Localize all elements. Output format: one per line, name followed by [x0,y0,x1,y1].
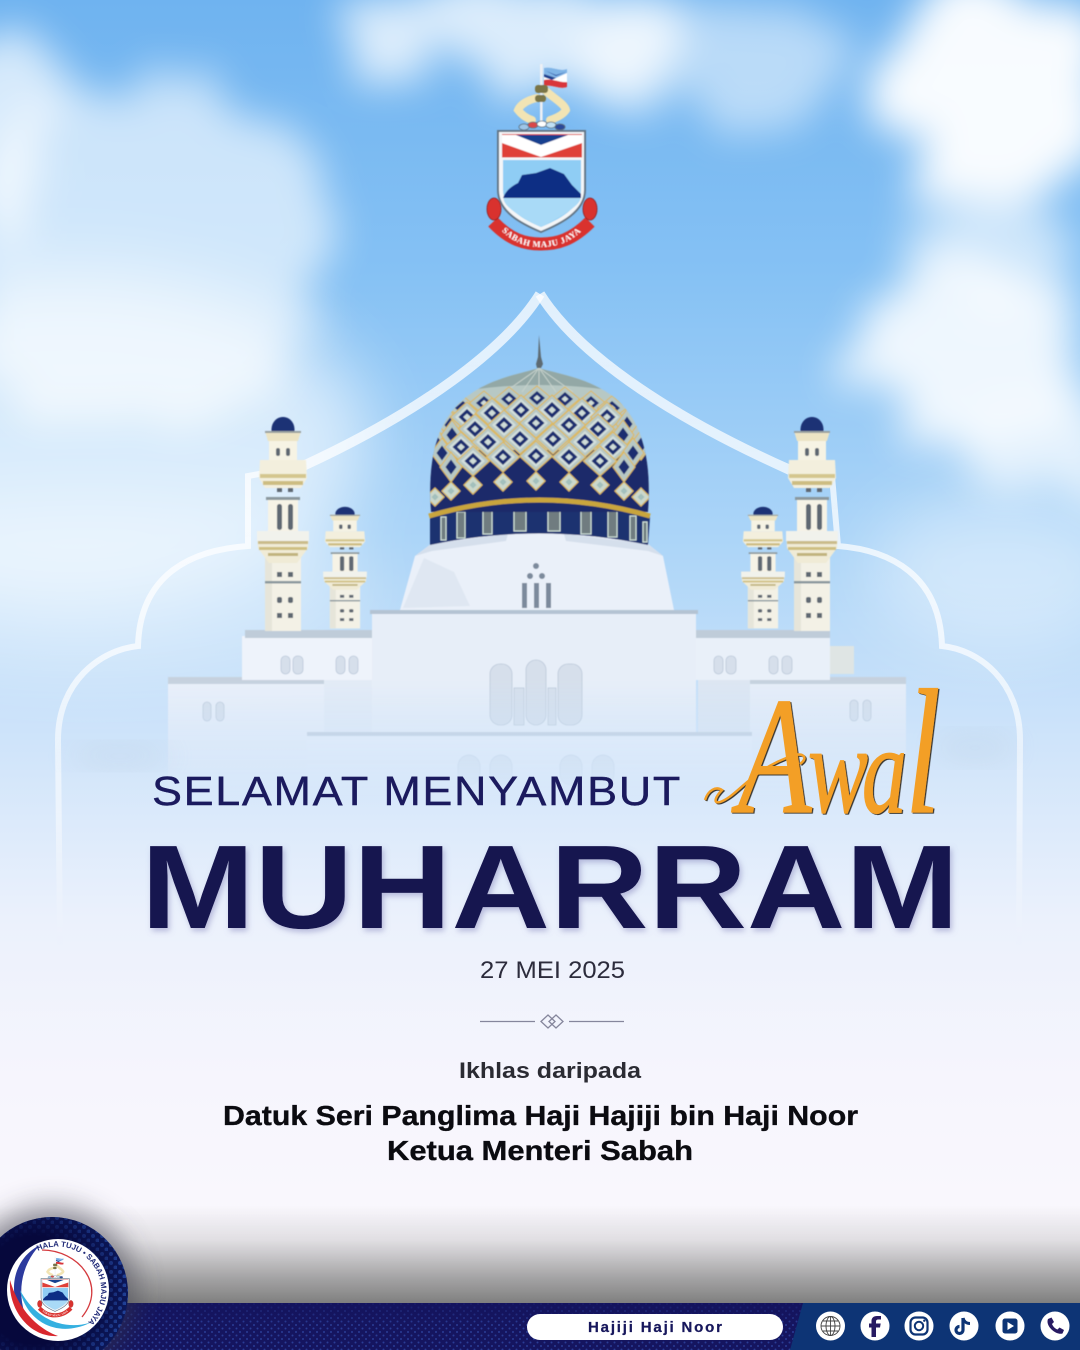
icon: phone [1040,1312,1070,1340]
left lower outline [58,466,303,945]
footer shadow [0,1205,1080,1303]
script word: Awal [705,654,941,851]
left roof curve [303,294,540,466]
sender name: Datuk Seri Panglima Haji Hajiji bin Haji Noor [223,1100,858,1131]
horizon trees right [935,736,1015,760]
badge circular motto: HALA TUJU • SABAH MAJU JAYA [36,1241,107,1324]
footer bar [0,1303,1080,1350]
shield [498,131,585,232]
badge glow shadow [0,1206,136,1350]
dome finial [536,335,543,368]
dome drum [430,504,650,545]
script word: Awal: l [905,654,941,851]
ribbon with motto: SABAH MAJU JAYA [502,226,582,248]
badge white disc [7,1239,109,1341]
lower mosque walls [168,610,906,760]
flag pole [540,64,543,124]
sender name and title [223,1100,858,1166]
wreath [519,121,565,130]
dome collar [400,533,674,610]
arch frame outline [58,294,1020,945]
clenched hands [535,85,548,102]
right small minaret [741,507,785,628]
sender title: Ketua Menteri Sabah [387,1135,693,1166]
icon: facebook [860,1312,890,1340]
icon: website globe [816,1312,845,1340]
icon: tiktok [950,1312,978,1340]
Sabah flag [544,68,567,88]
social icons [816,1312,1070,1340]
horizon trees left [70,747,170,765]
name pill [527,1314,783,1340]
left tall minaret [257,417,309,631]
coat of arms of Sabah [486,64,598,252]
sender intro: Ikhlas daripada [459,1058,642,1083]
script word: Awal: w [808,701,868,840]
clouds [0,0,1080,680]
ribbon with motto [486,196,598,252]
heading: MUHARRAM: MUHARRAM [141,821,959,954]
dome with lattice [420,360,660,516]
icon: instagram [904,1312,934,1340]
name pill: Hajiji Haji Noor [588,1319,722,1336]
ornamental divider [480,1015,624,1028]
badge coat of arms [37,1257,73,1317]
round campaign badge [0,1188,150,1350]
badge dark sphere [0,1217,128,1350]
badge red arc [42,1250,92,1317]
heading: selamat menyambut: SELAMAT MENYAMBUT [152,768,682,814]
mosque arched windows [202,655,872,766]
icon: youtube play [996,1312,1024,1340]
date: 27 MEI 2025 [480,957,625,984]
badge swooshes [10,1245,92,1336]
right lower outline [790,470,1020,945]
script word: Awal: a [862,701,907,840]
mosque [168,335,906,805]
script word: Awal: A [731,664,812,849]
right roof curve [540,294,790,470]
left small minaret [323,507,367,628]
right tall minaret [786,417,838,631]
arms holding the pole [518,91,566,120]
